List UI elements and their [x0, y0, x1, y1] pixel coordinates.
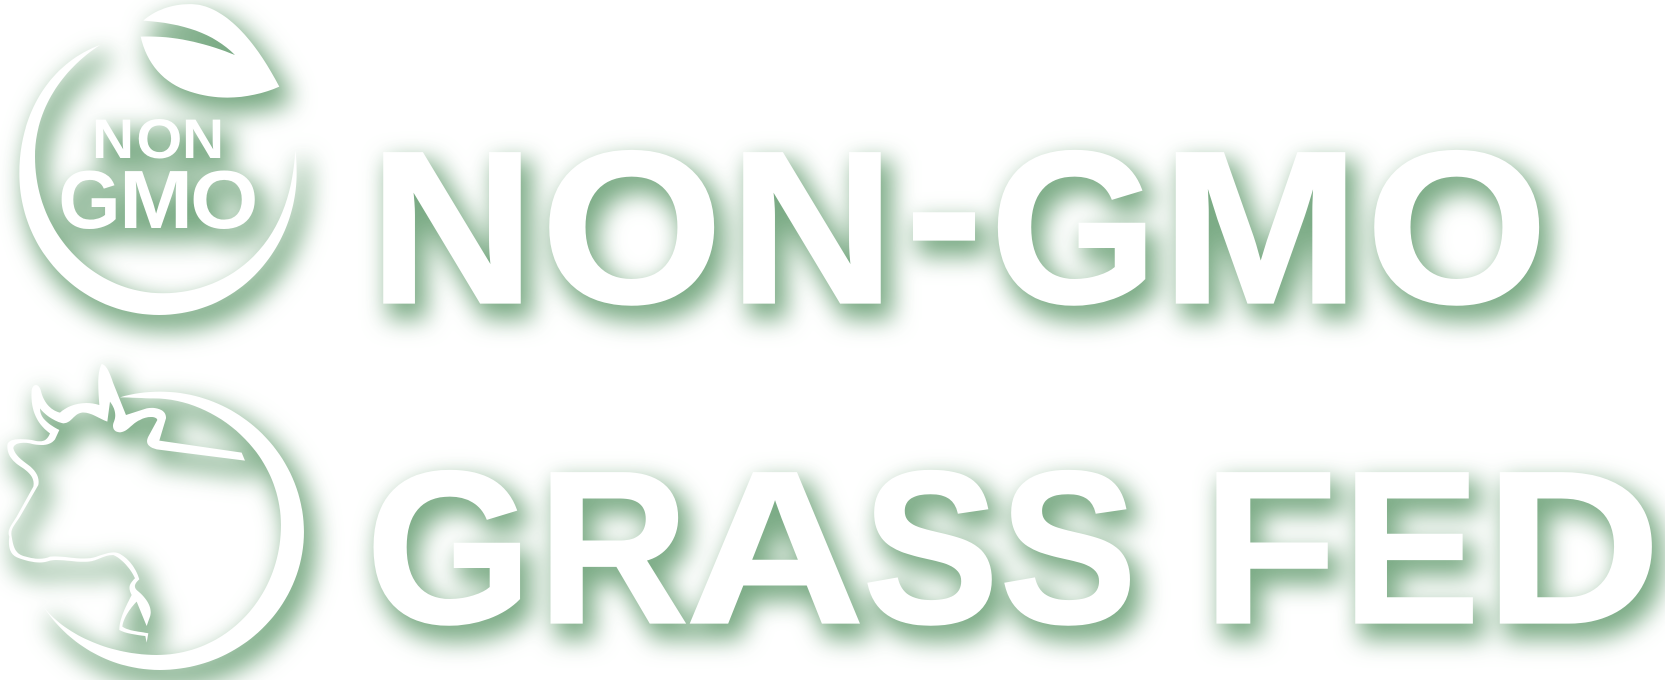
icon: cow head outline: [7, 364, 245, 643]
icon: cow ring: [43, 392, 304, 670]
heading: NON-GMO: N: [729, 107, 895, 349]
badge text: NON: [92, 109, 224, 171]
badge text: GMO: M: [119, 154, 193, 246]
badge text: GMO: O: [190, 154, 258, 246]
heading: GRASS FED: S: [1000, 426, 1137, 669]
icon: leaf: [141, 4, 279, 98]
icon: crescent ring: [19, 45, 297, 315]
heading: GRASS FED: G: [366, 426, 532, 669]
heading: NON-GMO: -: [905, 85, 983, 331]
heading: GRASS FED: S: [863, 426, 999, 669]
heading: NON-GMO: O: [1366, 106, 1548, 349]
heading: GRASS FED: R: [538, 427, 689, 669]
heading: NON-GMO: O: [541, 106, 723, 349]
heading: GRASS FED: F: [1203, 427, 1337, 669]
heading: NON-GMO: [369, 85, 1548, 349]
icon: non-GMO leaf badge: [19, 4, 297, 315]
badge text: NON: N: [182, 109, 224, 171]
heading: NON-GMO: G: [990, 106, 1158, 349]
badge text: GMO: [58, 154, 258, 246]
heading: NON-GMO: M: [1161, 107, 1360, 349]
heading: NON-GMO: N: [369, 107, 535, 349]
badge text: NON: N: [92, 109, 134, 171]
icon: grass-fed cow badge: [7, 364, 304, 670]
badge text: GMO: G: [58, 154, 121, 246]
heading: GRASS FED: D: [1485, 426, 1661, 669]
heading: GRASS FED: E: [1342, 426, 1480, 669]
badge text: NON: O: [136, 109, 182, 171]
heading: GRASS FED: [366, 426, 1661, 669]
heading: GRASS FED: A: [685, 427, 865, 669]
